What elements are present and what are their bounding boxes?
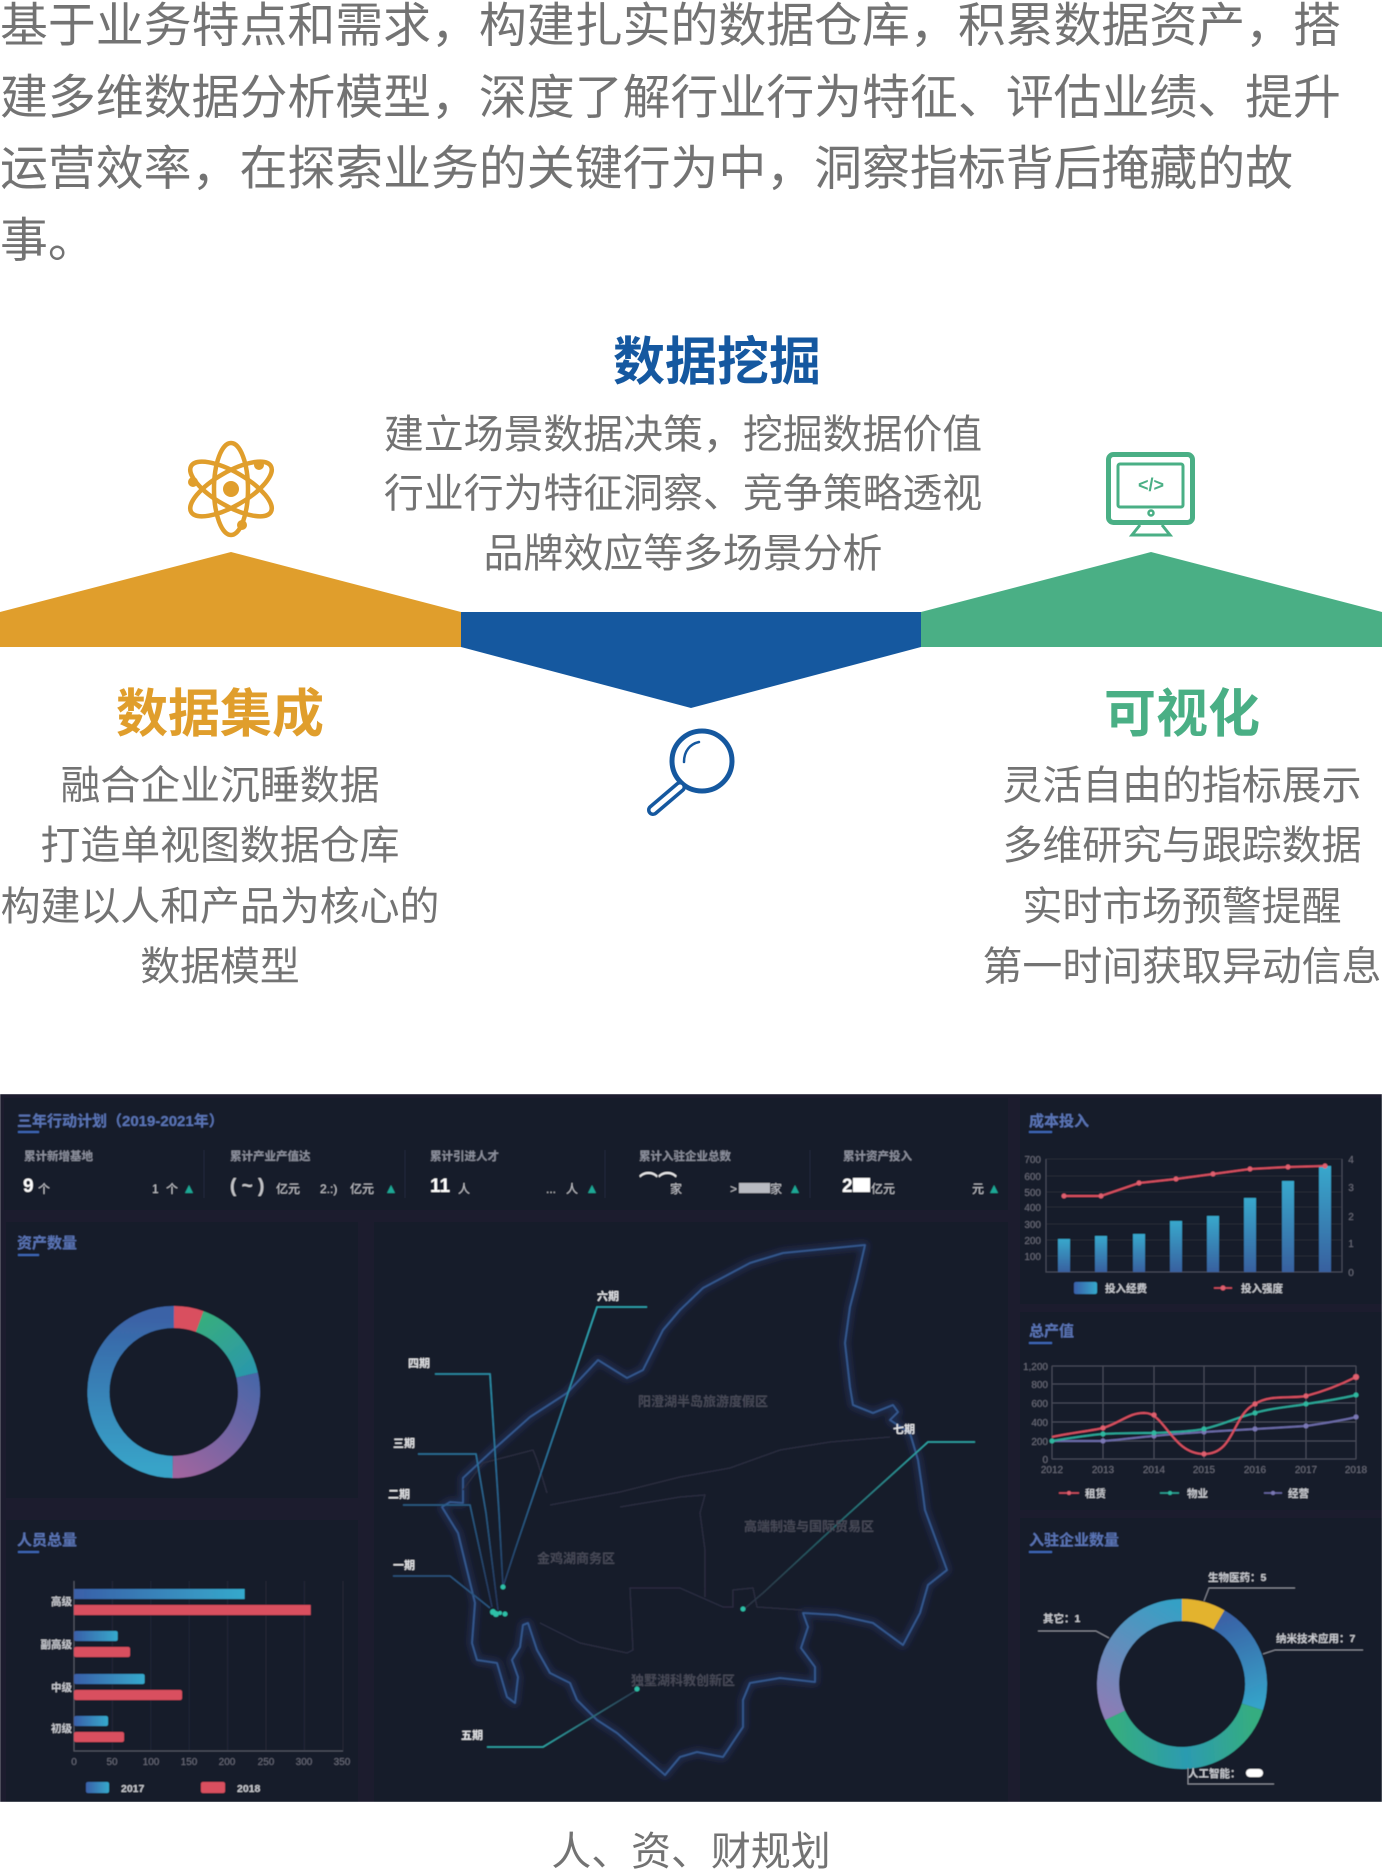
district boundaries [463,1437,890,1653]
text block: visualization description: 第一时间获取异动信息 [983,945,1381,989]
axis labels: 2018 [1345,1465,1368,1476]
intro paragraph: 建多维数据分析模型，深度了解行业行为特征、评估业绩、提升 [0,72,1341,125]
text block: data integration description [1,764,439,989]
axis labels: 高级 [51,1595,72,1608]
KPI: talent: 人 [458,1182,470,1196]
axis labels: 350 [334,1757,351,1768]
bars: staff by level [74,1589,311,1742]
dashboard screenshot [0,1094,1382,1802]
axis labels [1023,1362,1368,1476]
KPI: industrial output: 累计产业产值达 [230,1149,311,1163]
legend: 经营 [1288,1487,1309,1500]
KPI: new bases: 个 [38,1182,50,1196]
heading: data mining: 数据挖掘 [613,334,821,392]
text block: data mining description: 品牌效应等多场景分析 [484,532,882,576]
KPI: industrial output: ( ~ ) [230,1176,264,1197]
axis labels: 400 [1031,1418,1048,1429]
KPI: asset investment: 亿元 [871,1181,895,1196]
axis labels: 300 [296,1757,313,1768]
KPI: talent: ... [546,1182,556,1196]
callout: other [1038,1612,1109,1638]
KPI: asset investment: 累计资产投入 [843,1149,912,1163]
ribbon: blue segment [461,612,921,708]
panel: staff total bar chart [17,1531,351,1795]
KPI: enterprises [639,1149,799,1196]
axis labels: 初级 [51,1722,72,1735]
text block: data integration description: 融合企业沉睡数据 [60,764,380,808]
text block: data integration description: 构建以人和产品为核心的 [1,885,439,929]
text block: data mining description [384,413,982,576]
axis labels [40,1595,351,1768]
axis labels: 2014 [1143,1465,1166,1476]
axis labels: 4 [1348,1155,1354,1166]
map outline [442,1245,947,1775]
heading: three-year plan: 三年行动计划（2019-2021年） [17,1112,224,1130]
KPI: asset investment: 2 [842,1176,853,1197]
panel: asset count donut [17,1235,249,1467]
axis labels: 100 [143,1757,160,1768]
panel: enterprise count donut [1029,1531,1363,1784]
text block: data mining description: 建立场景数据决策，挖掘数据价值 [384,413,982,457]
KPI: new bases: 1 [152,1182,159,1196]
district names [537,1394,874,1688]
axis labels: 中级 [51,1681,72,1694]
district names: 独墅湖科教创新区 [631,1673,735,1688]
leader lines [393,1307,975,1747]
KPI: enterprises: ⌒⌒ [639,1171,677,1193]
phase labels: 三期 [393,1436,415,1450]
text block: data mining description: 行业行为特征洞察、竞争策略透视 [384,472,982,516]
KPI: enterprises: 家 [670,1181,682,1196]
axis labels: 800 [1031,1380,1048,1391]
axis labels: 2013 [1092,1465,1115,1476]
heading: total output: 总产值 [1029,1322,1074,1340]
KPI: enterprises: 累计入驻企业总数 [639,1149,731,1163]
axis labels: 150 [181,1757,198,1768]
site markers [490,1584,746,1692]
legend: 投入强度 [1241,1282,1283,1295]
KPI: talent [430,1149,596,1197]
axis labels [1024,1155,1354,1279]
line: purple series [1052,1414,1358,1444]
callout: nanotechnology [1263,1632,1363,1654]
KPI: industrial output: 亿元 [276,1181,300,1196]
text block: data integration description: 数据模型 [140,945,300,989]
axis labels: 2016 [1244,1465,1267,1476]
axis labels: 2 [1348,1212,1354,1223]
panel: park map [388,1245,975,1775]
phase labels: 五期 [461,1728,483,1742]
legend: 投入经费 [1105,1282,1147,1295]
axis labels: 0 [71,1757,77,1768]
legend: 2017 [121,1783,145,1795]
KPI: new bases [23,1149,193,1197]
axis labels: 300 [1024,1220,1041,1231]
district names: 高端制造与国际贸易区 [744,1519,874,1534]
callout: biomedicine: 生物医药：5 [1208,1571,1266,1584]
callout: artificial intelligence: 人工智能： [1188,1767,1240,1780]
legend: 2018 [237,1783,261,1795]
legend [1074,1282,1283,1295]
phase labels: 二期 [388,1487,410,1501]
panel: three-year plan KPIs [17,1112,998,1198]
KPI: talent: 累计引进人才 [430,1149,499,1163]
text block: visualization description: 实时市场预警提醒 [1022,885,1342,929]
KPI: industrial output: 亿元 [350,1181,374,1196]
KPI: talent: 11 [430,1176,451,1197]
callout: nanotechnology: 纳米技术应用：7 [1276,1632,1355,1645]
ribbon: orange segment [0,552,461,647]
axis labels: 200 [219,1757,236,1768]
intro paragraph: 运营效率，在探索业务的关键行为中，洞察指标背后掩藏的故 [0,143,1293,196]
line: red series [1052,1374,1359,1456]
axis labels: 400 [1024,1203,1041,1214]
axis labels: 1 [1348,1239,1354,1250]
district names: 金鸡湖商务区 [537,1551,615,1566]
KPI: industrial output [230,1149,395,1197]
line: investment intensity [1062,1164,1328,1198]
KPI: asset investment [842,1149,998,1197]
KPI: talent: 人 [566,1182,578,1196]
donut chart: enterprises [1108,1610,1256,1758]
axis labels: 1,200 [1023,1362,1048,1373]
intro paragraph [0,0,1341,268]
phase labels: 六期 [597,1289,619,1303]
axis labels: 50 [106,1757,118,1768]
icon: atom [183,443,279,535]
axis labels: 100 [1024,1252,1041,1263]
ribbon: green segment [921,552,1382,647]
panel: total output chart [1023,1322,1368,1500]
donut chart: assets [98,1317,249,1467]
phase labels [388,1289,915,1742]
axis labels: 250 [258,1757,275,1768]
KPI: enterprises: 家 [770,1181,782,1196]
KPI: new bases: 9 [23,1176,34,1197]
callout: artificial intelligence [1188,1767,1274,1784]
district names: 阳澄湖半岛旅游度假区 [638,1394,768,1409]
axis labels: 3 [1348,1183,1354,1194]
intro paragraph: 基于业务特点和需求，构建扎实的数据仓库，积累数据资产，搭 [0,0,1341,53]
legend: 物业 [1187,1487,1208,1500]
icon: monitor: </> [1138,475,1164,495]
text block: visualization description [983,764,1381,989]
KPI: industrial output: 2.:) [320,1182,337,1196]
KPI: enterprises: > [730,1182,737,1196]
KPI: asset investment: 元 [972,1182,984,1196]
text block: visualization description: 灵活自由的指标展示 [1002,764,1362,808]
heading: enterprise count: 入驻企业数量 [1029,1531,1119,1549]
axis labels: 200 [1031,1437,1048,1448]
axis labels: 2017 [1295,1465,1318,1476]
heading: asset count: 资产数量 [17,1235,77,1252]
icon: monitor [1108,454,1192,535]
KPI: new bases: 个 [166,1182,178,1196]
line: green series [1050,1392,1358,1444]
axis labels: 200 [1024,1236,1041,1247]
intro paragraph: 事。 [0,215,96,268]
map outline glow [442,1245,947,1775]
text block: data integration description: 打造单视图数据仓库 [40,824,400,868]
phase labels: 七期 [893,1422,915,1436]
axis labels: 0 [1042,1455,1048,1466]
legend: 租赁 [1085,1487,1106,1500]
legend [86,1782,261,1795]
axis labels: 500 [1024,1188,1041,1199]
panel: cost investment chart [1024,1112,1354,1295]
heading: visualization: 可视化 [1104,686,1260,744]
axis labels: 600 [1024,1172,1041,1183]
KPI: new bases: 累计新增基地 [24,1149,93,1163]
phase labels: 一期 [393,1558,415,1572]
callout: other: 其它：1 [1043,1612,1080,1625]
callout: biomedicine [1204,1571,1295,1601]
axis labels: 2015 [1193,1465,1216,1476]
text block: visualization description: 多维研究与跟踪数据 [1002,824,1362,868]
heading: staff total: 人员总量 [17,1531,77,1549]
axis labels: 600 [1031,1399,1048,1410]
axis labels: 700 [1024,1155,1041,1166]
heading: data integration: 数据集成 [116,686,324,744]
heading: cost investment: 成本投入 [1029,1112,1089,1130]
legend [1059,1487,1309,1500]
phase labels: 四期 [408,1356,430,1370]
bars: investment funding [1058,1166,1331,1272]
axis labels: 2012 [1041,1465,1064,1476]
axis labels: 0 [1348,1268,1354,1279]
axis labels: 副高级 [40,1638,72,1651]
icon: magnifier [653,731,732,810]
